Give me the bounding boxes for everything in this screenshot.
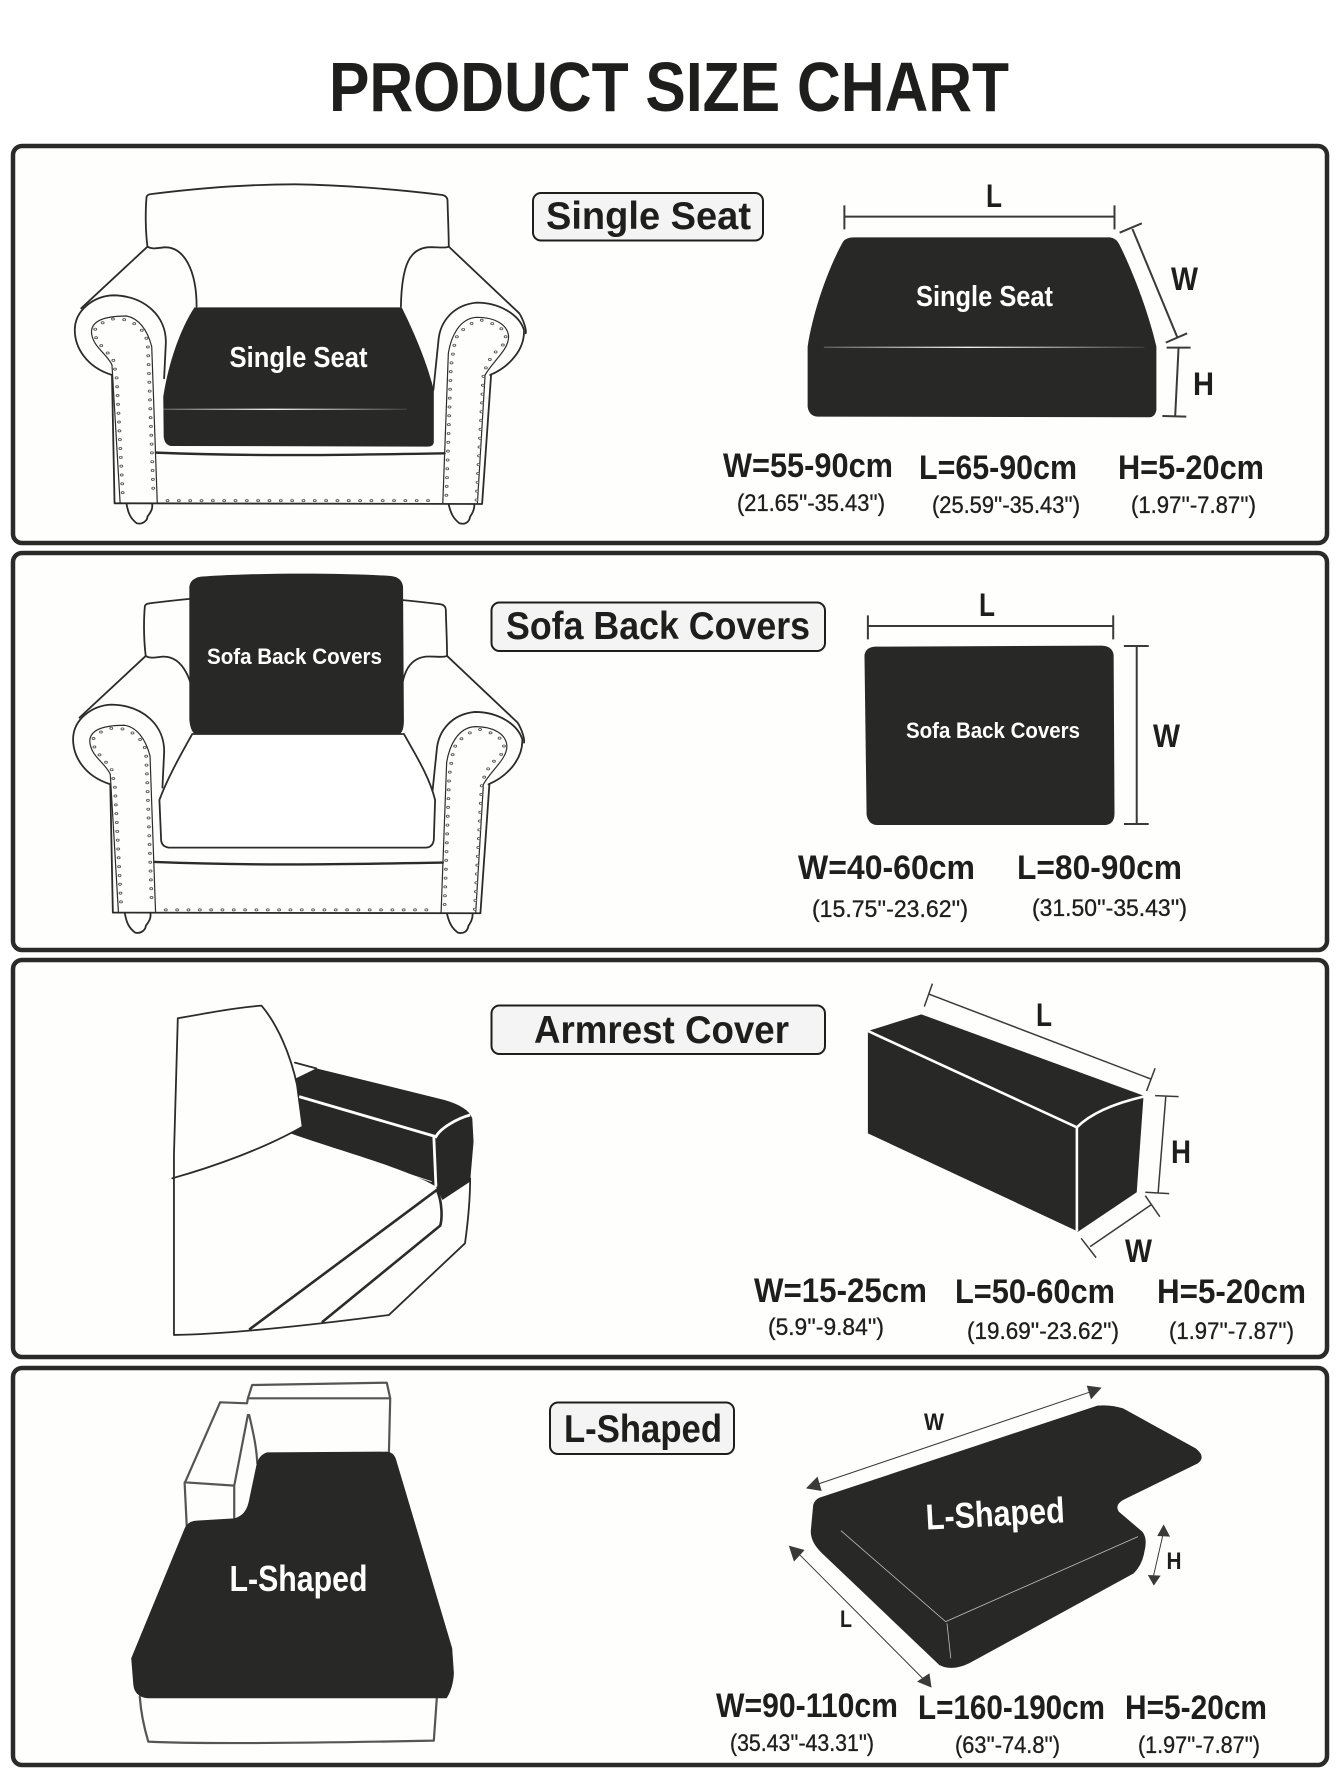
specs: l-shaped sizes: (63''-74.8'') [955,1732,1060,1759]
diagram: single seat cushion dimensions: Single Seat [916,281,1053,313]
icon: sofa section with l-shaped cover [131,1383,454,1743]
specs: armrest sizes: (19.69''-23.62'') [967,1318,1119,1345]
icon: sofa section with l-shaped cover: L-Shaped [230,1558,368,1599]
icon: armchair with single seat highlighted: Single Seat [230,342,368,374]
diagram: armrest cover dimensions: W [1125,1233,1153,1269]
diagram: armrest cover dimensions [868,984,1191,1269]
diagram: sofa back cushion dimensions: Sofa Back Covers [906,718,1080,743]
specs: single seat sizes: H=5-20cm [1118,449,1264,487]
diagram: single seat cushion dimensions [808,178,1214,417]
specs: single seat sizes: W=55-90cm [723,447,893,485]
specs: single seat sizes [723,447,1264,519]
diagram: single seat cushion dimensions: W [1171,261,1199,297]
specs: sofa back sizes: L=80-90cm [1017,849,1182,887]
diagram: armrest cover dimensions: H [1171,1134,1191,1170]
diagram: l-shaped cushion dimensions: L [840,1606,852,1633]
icon: sofa corner with armrest highlighted [172,1006,474,1335]
panel: single seat [13,146,1327,543]
specs: sofa back sizes: (15.75''-23.62'') [812,896,968,923]
diagram: single seat cushion dimensions: L [986,178,1002,214]
specs: sofa back sizes: W=40-60cm [798,849,975,887]
panel: l-shaped [13,1368,1327,1765]
specs: l-shaped sizes: (35.43''-43.31'') [730,1730,874,1757]
diagram: single seat cushion dimensions: H [1193,366,1214,402]
heading: single seat: Single Seat [546,195,751,238]
icon: armchair with single seat highlighted [75,184,526,524]
specs: armrest sizes [754,1272,1306,1345]
specs: armrest sizes: W=15-25cm [754,1272,927,1310]
specs: armrest sizes: L=50-60cm [955,1273,1115,1311]
specs: l-shaped sizes [716,1687,1267,1759]
diagram: l-shaped cushion dimensions: H [1166,1548,1182,1575]
title: PRODUCT SIZE CHART [329,48,1009,126]
specs: single seat sizes: L=65-90cm [919,449,1077,487]
specs: armrest sizes: (1.97''-7.87'') [1169,1318,1294,1345]
specs: armrest sizes: (5.9''-9.84'') [768,1314,884,1341]
icon: armchair with back cover highlighted [73,574,524,933]
specs: l-shaped sizes: W=90-110cm [716,1687,898,1725]
specs: single seat sizes: (21.65''-35.43'') [737,490,885,517]
heading: l-shaped: L-Shaped [564,1408,722,1451]
specs: sofa back sizes [798,849,1187,923]
diagram: armrest cover dimensions: L [1036,997,1052,1033]
diagram: l-shaped cushion dimensions: L-Shaped [925,1489,1066,1538]
diagram: sofa back cushion dimensions: L [979,587,995,623]
specs: l-shaped sizes: H=5-20cm [1125,1689,1267,1727]
panel: armrest cover [13,960,1327,1357]
heading: armrest cover: Armrest Cover [534,1009,789,1052]
diagram: l-shaped cushion dimensions: W [924,1409,944,1436]
specs: l-shaped sizes: (1.97''-7.87'') [1138,1732,1260,1759]
specs: armrest sizes: H=5-20cm [1157,1273,1306,1311]
heading: sofa back covers: Sofa Back Covers [506,605,810,648]
diagram: l-shaped cushion dimensions [789,1386,1202,1688]
specs: single seat sizes: (25.59''-35.43'') [932,492,1080,519]
icon: armchair with back cover highlighted: Sofa Back Covers [207,644,382,669]
diagram: sofa back cushion dimensions: W [1153,718,1181,754]
specs: l-shaped sizes: L=160-190cm [918,1689,1105,1727]
diagram: sofa back cushion dimensions [864,587,1181,825]
panel: sofa back covers [13,553,1327,950]
specs: single seat sizes: (1.97''-7.87'') [1131,492,1256,519]
specs: sofa back sizes: (31.50''-35.43'') [1032,895,1187,922]
